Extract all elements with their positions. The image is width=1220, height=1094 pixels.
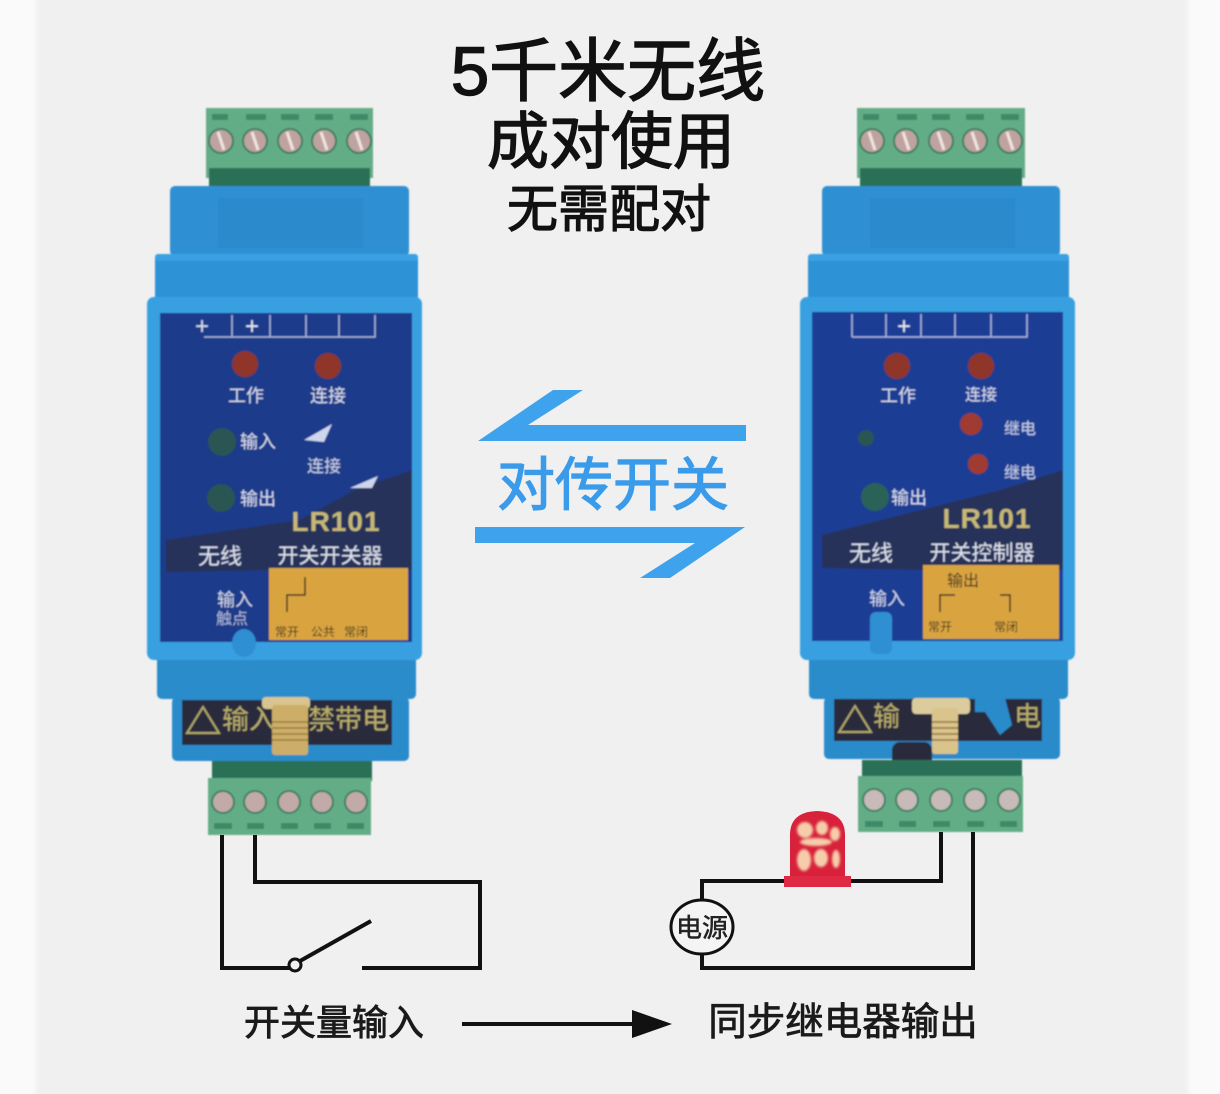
front panel: 输出 bbox=[240, 489, 276, 509]
warning label bbox=[834, 698, 1042, 741]
warning label: 输 bbox=[873, 702, 900, 732]
front panel: 公共 bbox=[311, 625, 335, 639]
front panel: 继电 bbox=[1004, 420, 1036, 438]
front panel: 开关控制器 bbox=[930, 542, 1034, 565]
title: 5千米无线: 5千米无线 bbox=[451, 33, 765, 110]
blue housing bbox=[147, 186, 422, 761]
warning label: 禁带电 bbox=[308, 705, 389, 735]
front panel: 输入 bbox=[869, 589, 905, 609]
right device bbox=[800, 108, 1075, 832]
front panel: 触点 bbox=[216, 610, 248, 628]
SMA antenna connector bbox=[262, 697, 310, 755]
wiring: switch input bbox=[222, 835, 480, 971]
warning label: 电 bbox=[1014, 702, 1041, 732]
subtitle: 成对使用: 成对使用 bbox=[487, 108, 735, 177]
front panel: 连接 bbox=[310, 386, 346, 406]
front panel: 常开 bbox=[275, 625, 299, 639]
front panel: 工作 bbox=[228, 386, 264, 406]
icon: red warning lamp bbox=[784, 811, 851, 887]
front panel: 常闭 bbox=[994, 620, 1018, 634]
LED indicators bbox=[884, 353, 910, 379]
front panel: 无线 bbox=[849, 541, 893, 566]
front panel: 连接 bbox=[965, 386, 997, 404]
arrow: input to output bbox=[462, 1010, 672, 1038]
SMA antenna connector bbox=[892, 698, 970, 766]
front panel: 输出 bbox=[947, 572, 979, 590]
front panel bbox=[812, 312, 1063, 654]
front panel: 继电 bbox=[1004, 464, 1036, 482]
bottom terminal block bbox=[208, 761, 372, 835]
front panel: 输出 bbox=[891, 488, 927, 508]
front panel: + bbox=[897, 313, 911, 340]
front panel: 工作 bbox=[880, 386, 916, 406]
front panel: 常开 bbox=[928, 620, 952, 634]
LED indicators bbox=[232, 351, 258, 377]
subtitle: 无需配对: 无需配对 bbox=[507, 181, 711, 238]
front panel: 无线 bbox=[198, 544, 242, 569]
front panel bbox=[160, 313, 412, 657]
icon: power source: 电源 bbox=[676, 913, 728, 943]
front panel: 常闭 bbox=[344, 625, 368, 639]
front panel: LR101 bbox=[291, 506, 381, 537]
label: 对传开关: 对传开关 bbox=[497, 453, 729, 518]
wiring: relay output and power source bbox=[671, 832, 973, 968]
front panel: 输入 bbox=[217, 590, 253, 610]
caption: 开关量输入: 开关量输入 bbox=[244, 1002, 424, 1043]
front panel: 输入 bbox=[240, 432, 276, 452]
front panel: + bbox=[195, 313, 209, 340]
front panel: LR101 bbox=[942, 503, 1032, 534]
front panel: 开关开关器 bbox=[278, 545, 382, 568]
front panel: 连接 bbox=[307, 457, 341, 476]
arrow: lower, pointing right bbox=[475, 527, 745, 578]
left device bbox=[147, 108, 422, 835]
icon: power source bbox=[671, 900, 733, 954]
top terminal block bbox=[857, 108, 1025, 186]
warning label bbox=[182, 700, 392, 745]
caption: 同步继电器输出: 同步继电器输出 bbox=[708, 1001, 978, 1044]
blue housing bbox=[800, 186, 1075, 759]
warning label: 输入 bbox=[222, 705, 276, 735]
top terminal block bbox=[206, 108, 373, 186]
bottom terminal block bbox=[858, 760, 1023, 832]
arrow: upper, pointing left bbox=[478, 390, 746, 441]
front panel: + bbox=[245, 313, 259, 340]
